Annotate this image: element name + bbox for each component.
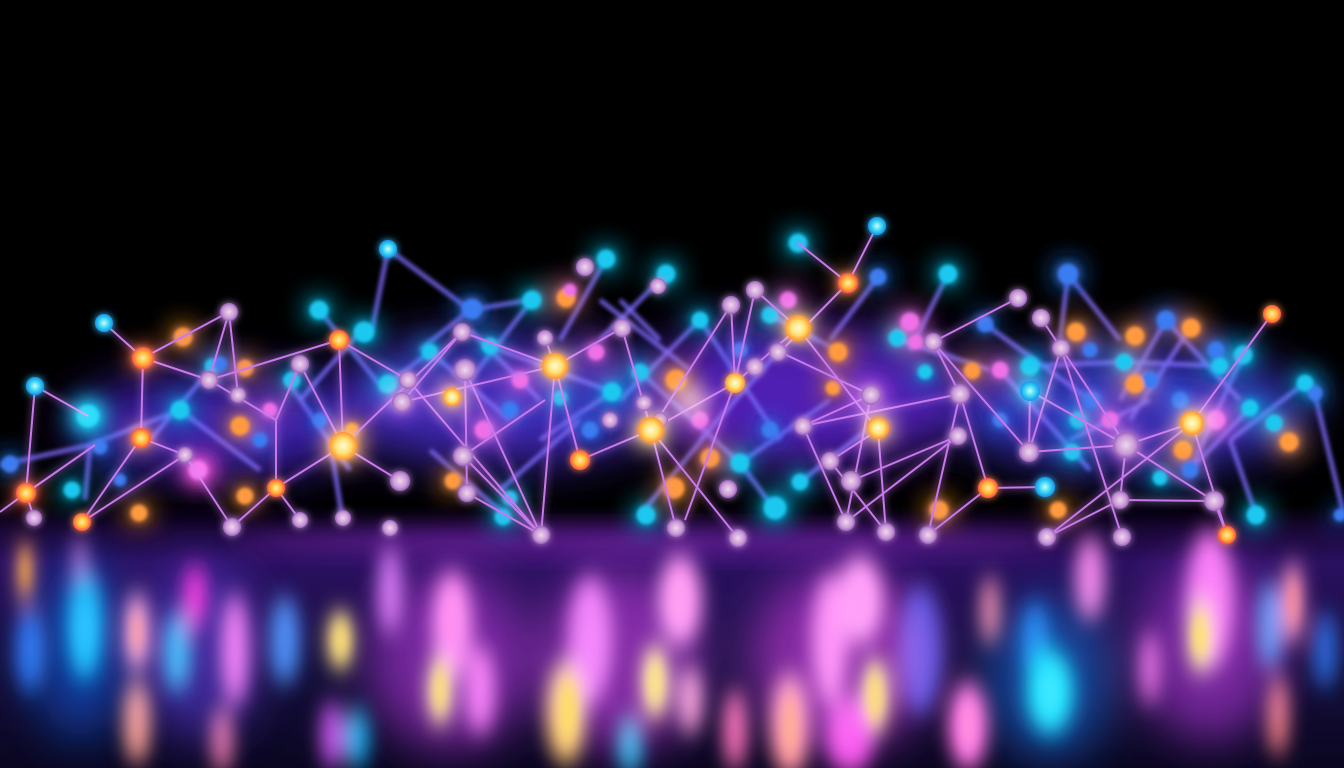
network: yellow and orange hot nodes [16,273,1281,544]
floor: broad coloured light columns [35,560,1280,760]
floor: coloured light reflections [16,530,1337,768]
network: pink-white crystalline nodes [26,258,1224,547]
network: bright bloom around hot nodes [14,272,1224,505]
network: out-of-focus back nodes [2,234,1344,525]
network: cyan foreground nodes [26,217,1055,497]
network: broad background bloom [70,325,1310,475]
floor: bright reflection cores [21,552,1298,755]
floor: purple haze [0,505,1344,768]
network: out-of-focus back edges [0,249,1344,517]
network: foreground edges [0,226,1272,538]
